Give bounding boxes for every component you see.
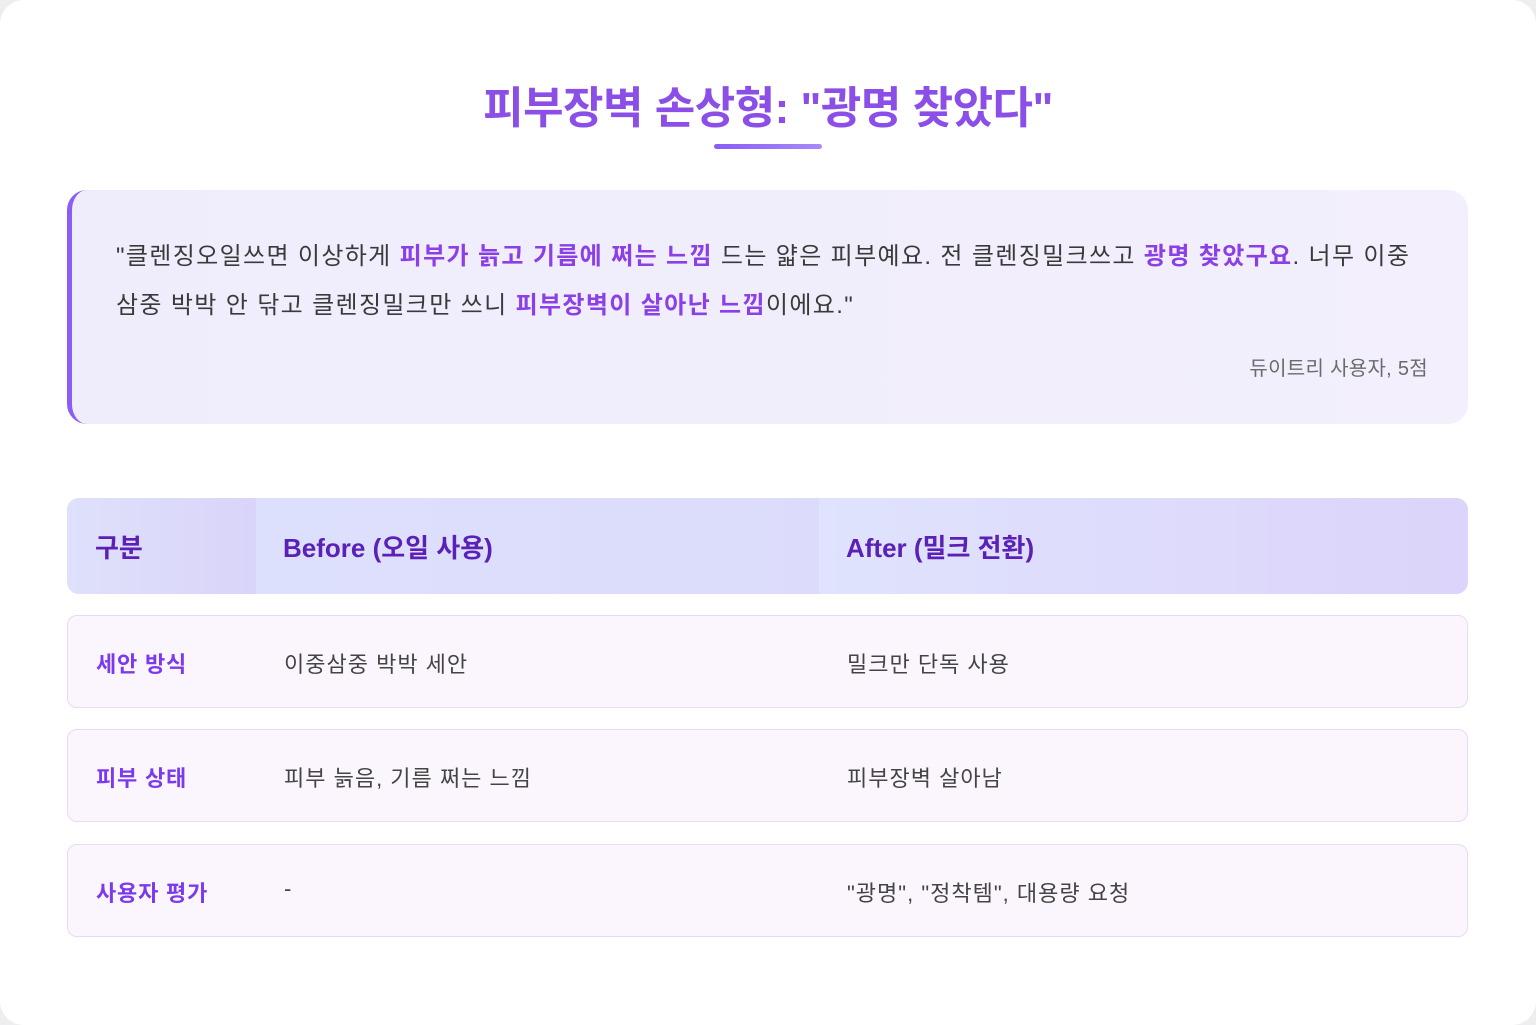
row: 사용자 평가: 사용자 평가 <box>96 881 208 906</box>
table header <box>67 498 1468 594</box>
title: 피부장벽 손상형: "광명 찾았다" <box>483 84 1053 133</box>
header: 구분: 구분 <box>95 533 143 563</box>
panel: review quote <box>67 190 1468 424</box>
quote text: 삼중 박박 안 닦고 클렌징밀크만 쓰니 피부장벽이 살아난 느낌이에요." <box>116 292 854 319</box>
row: 사용자 평가 <box>67 844 1468 937</box>
quote text <box>116 243 1410 319</box>
row: 세안 방식 <box>67 615 1468 708</box>
quote author: 듀이트리 사용자, 5점 <box>1249 358 1428 380</box>
row: 피부 상태: 피부장벽 살아남 <box>847 766 1003 791</box>
title underline <box>714 144 822 149</box>
row: 피부 상태: 피부 상태 <box>96 766 187 791</box>
row: 피부 상태: 피부 늙음, 기름 쩌는 느낌 <box>284 766 532 791</box>
row: 세안 방식: 밀크만 단독 사용 <box>847 652 1010 677</box>
row: 피부 상태 <box>67 729 1468 822</box>
row: 세안 방식: 세안 방식 <box>96 652 187 677</box>
row: 세안 방식: 이중삼중 박박 세안 <box>284 652 468 677</box>
header: after: After (밀크 전환) <box>846 533 1034 563</box>
row: 사용자 평가: "광명", "정착템", 대용량 요청 <box>847 881 1130 906</box>
row: 사용자 평가: - <box>284 876 292 901</box>
quote text: "클렌징오일쓰면 이상하게 피부가 늙고 기름에 쩌는 느낌 드는 얇은 피부예요. 전 클렌징밀크쓰고 광명 찾았구요. 너무 이중 <box>116 243 1410 270</box>
header: before: Before (오일 사용) <box>283 533 493 563</box>
